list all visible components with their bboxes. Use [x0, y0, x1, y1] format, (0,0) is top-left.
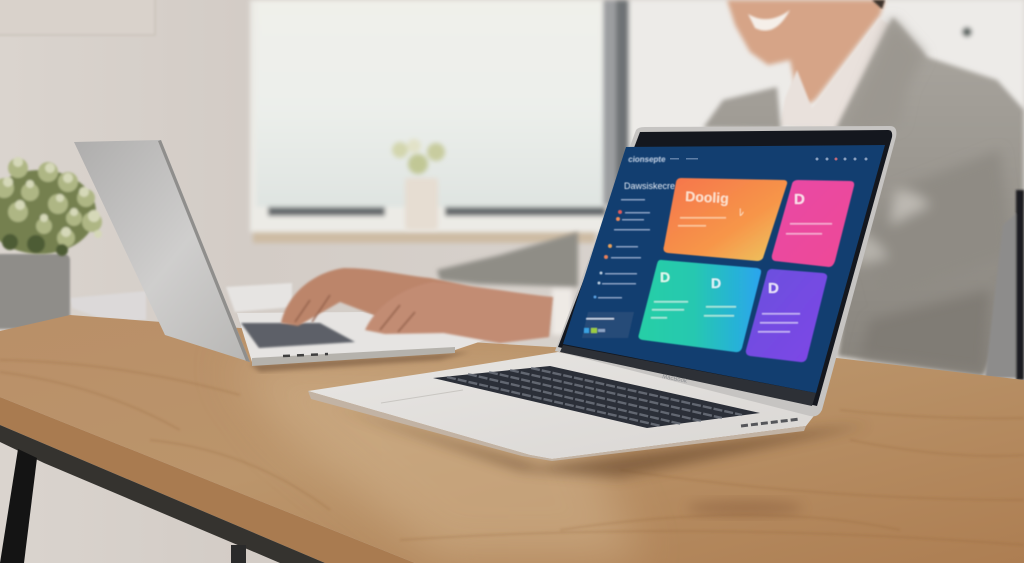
sidebar: Dawsiskecre — [624, 181, 675, 191]
sidebar — [582, 181, 675, 338]
sidebar mini card — [582, 312, 634, 338]
left laptop ports — [283, 354, 328, 356]
hair — [872, 0, 885, 9]
hinge label: MacBook — [662, 374, 688, 385]
plant pot — [0, 254, 70, 329]
chair back — [985, 190, 1024, 380]
keyboard deck — [308, 352, 820, 459]
window — [250, 0, 1024, 243]
orange card — [664, 178, 787, 261]
nav links — [670, 158, 698, 160]
smile — [748, 10, 790, 31]
ports — [741, 419, 800, 426]
orange card: ﾚ — [739, 208, 744, 219]
keyboard — [433, 366, 760, 428]
desk leg back — [231, 545, 246, 563]
person's sleeve, cuff and hands — [437, 232, 578, 335]
jacket lapel and arm folds — [846, 18, 1012, 372]
silver laptop, left — [74, 140, 485, 372]
desk front edge — [0, 397, 415, 563]
teal card — [638, 260, 761, 352]
left laptop keyboard — [241, 323, 355, 348]
main laptop — [308, 126, 896, 478]
purple card — [746, 269, 827, 362]
desk shadow — [333, 407, 870, 478]
pink card: D — [794, 191, 805, 208]
desk wood knot — [687, 500, 803, 516]
hands over keyboard — [281, 268, 553, 343]
left laptop shadow — [250, 352, 470, 372]
screen — [563, 145, 885, 393]
desk light reflection — [230, 360, 640, 560]
desk leg left — [0, 449, 37, 563]
face and neck — [727, 0, 885, 108]
orange card: Doolig — [685, 188, 729, 206]
wood grain — [0, 360, 1024, 545]
pink card — [772, 180, 854, 267]
lid bezel — [555, 126, 896, 416]
papers on desk — [70, 283, 292, 322]
plant foliage — [0, 157, 102, 256]
purple card: D — [768, 280, 779, 297]
teal card: D — [660, 269, 670, 285]
deck front edge — [308, 391, 806, 461]
nav dots — [816, 158, 868, 160]
shirt collar — [780, 18, 897, 130]
left laptop base — [237, 312, 485, 362]
windowsill vase and flowers — [392, 139, 445, 230]
person — [703, 0, 1024, 380]
teal card: D — [711, 275, 721, 291]
trackpad line — [381, 390, 463, 403]
screen chin — [560, 345, 816, 406]
screen UI — [582, 155, 868, 362]
desk steel frame — [0, 425, 325, 563]
left laptop lid — [74, 140, 250, 362]
topbar logo: cionsepte — [628, 155, 666, 164]
wooden desk — [0, 315, 1024, 563]
picture frame on wall — [0, 0, 155, 35]
jacket — [703, 17, 1024, 376]
